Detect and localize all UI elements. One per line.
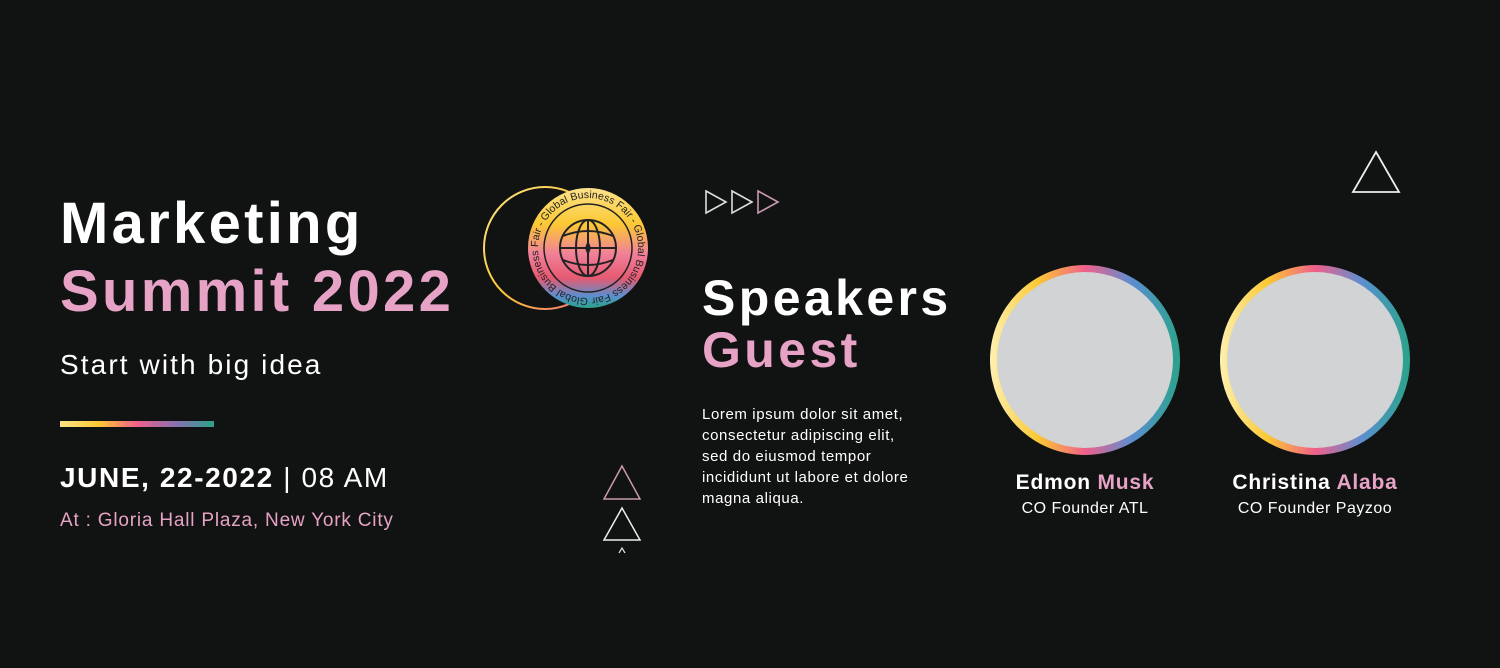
speaker portraits [990, 265, 1410, 455]
subtitle: Start with big idea [60, 349, 322, 380]
heading: Speakers Guest [702, 270, 952, 378]
heading: Speakers Guest: Guest [702, 322, 861, 378]
badge: Global Business Fair [483, 186, 648, 310]
title: Marketing [60, 191, 364, 256]
icon: play arrows [705, 190, 780, 214]
text block: lorem [702, 406, 908, 507]
date: JUNE, 22-2022 | 08 AM [60, 462, 389, 493]
text block: lorem: Lorem ipsum dolor sit amet, [702, 406, 903, 423]
portrait: Edmon [990, 265, 1180, 455]
icon: top right triangle [1352, 150, 1400, 193]
text block: lorem: magna aliqua. [702, 490, 804, 507]
speaker name: Christina Alaba: Christina Alaba [1232, 471, 1398, 494]
role: Christina: CO Founder Payzoo [1238, 500, 1392, 517]
role: Edmon: CO Founder ATL [1022, 500, 1148, 517]
heading: Speakers Guest: Speakers [702, 270, 952, 326]
text block: lorem: consectetur adipiscing elit, [702, 427, 895, 444]
gradient bar [60, 421, 214, 427]
portrait: Christina [1220, 265, 1410, 455]
location: At : Gloria Hall Plaza, New York City [60, 510, 394, 531]
title: Summit 2022 [60, 259, 454, 324]
text block: lorem: incididunt ut labore et dolore [702, 469, 908, 486]
icon: triangles [602, 464, 642, 554]
text block: lorem: sed do eiusmod tempor [702, 448, 871, 465]
title [60, 191, 454, 324]
speaker name: Edmon Musk: Edmon Musk [1016, 471, 1154, 494]
